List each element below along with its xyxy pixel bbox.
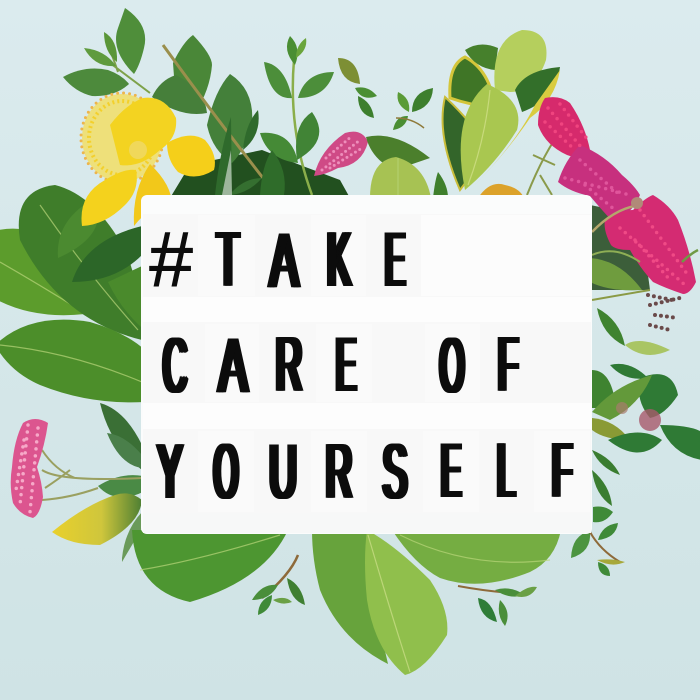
text: YOURSELF: O bbox=[214, 427, 238, 515]
text: TAKE: T bbox=[217, 215, 239, 303]
text: YOURSELF: F bbox=[552, 427, 572, 514]
letter row 1 background bbox=[143, 214, 591, 297]
text: YOURSELF: U bbox=[269, 428, 297, 516]
top centre sprig bbox=[260, 36, 334, 195]
letter row 3 background bbox=[143, 429, 591, 513]
dark foliage behind board, top bbox=[170, 150, 350, 198]
text: CARE OF bbox=[163, 321, 518, 409]
text: CARE OF: O bbox=[440, 321, 464, 409]
dark foliage behind pink flowers bbox=[590, 205, 650, 290]
text: YOURSELF bbox=[158, 426, 572, 516]
variegated leaves top right bbox=[443, 30, 560, 190]
text: CARE OF: E bbox=[336, 321, 356, 408]
text: YOURSELF: R bbox=[326, 428, 352, 515]
text: CARE OF: F bbox=[498, 321, 518, 408]
text: hash: # bbox=[149, 215, 193, 303]
bottom left foliage bbox=[42, 403, 143, 562]
bottom leaves bbox=[132, 530, 561, 675]
text: CARE OF: A bbox=[219, 323, 247, 409]
text: YOURSELF: L bbox=[497, 426, 515, 514]
letter row 2 background bbox=[143, 322, 591, 403]
text: TAKE: A bbox=[270, 218, 298, 304]
text: TAKE bbox=[217, 215, 405, 304]
small sprigs bbox=[338, 58, 433, 130]
icon: pink flowers right bbox=[527, 97, 698, 294]
text: TAKE: K bbox=[327, 215, 351, 303]
top left leaves bbox=[63, 8, 263, 195]
left foliage bbox=[0, 185, 145, 402]
right foliage bbox=[571, 258, 700, 576]
text: CARE OF: C bbox=[163, 322, 187, 409]
panel: lightbox bbox=[141, 195, 592, 534]
text: CARE OF: R bbox=[276, 321, 302, 408]
centre top leaves bbox=[366, 136, 524, 198]
text: YOURSELF: S bbox=[383, 428, 407, 515]
text: YOURSELF: E bbox=[441, 427, 461, 514]
icon: pink flower bottom left bbox=[11, 419, 48, 518]
icon: pink flower top bbox=[314, 132, 368, 176]
text: YOURSELF: Y bbox=[158, 428, 182, 515]
icon: yellow flower bbox=[81, 93, 215, 226]
text: TAKE: E bbox=[385, 216, 405, 303]
